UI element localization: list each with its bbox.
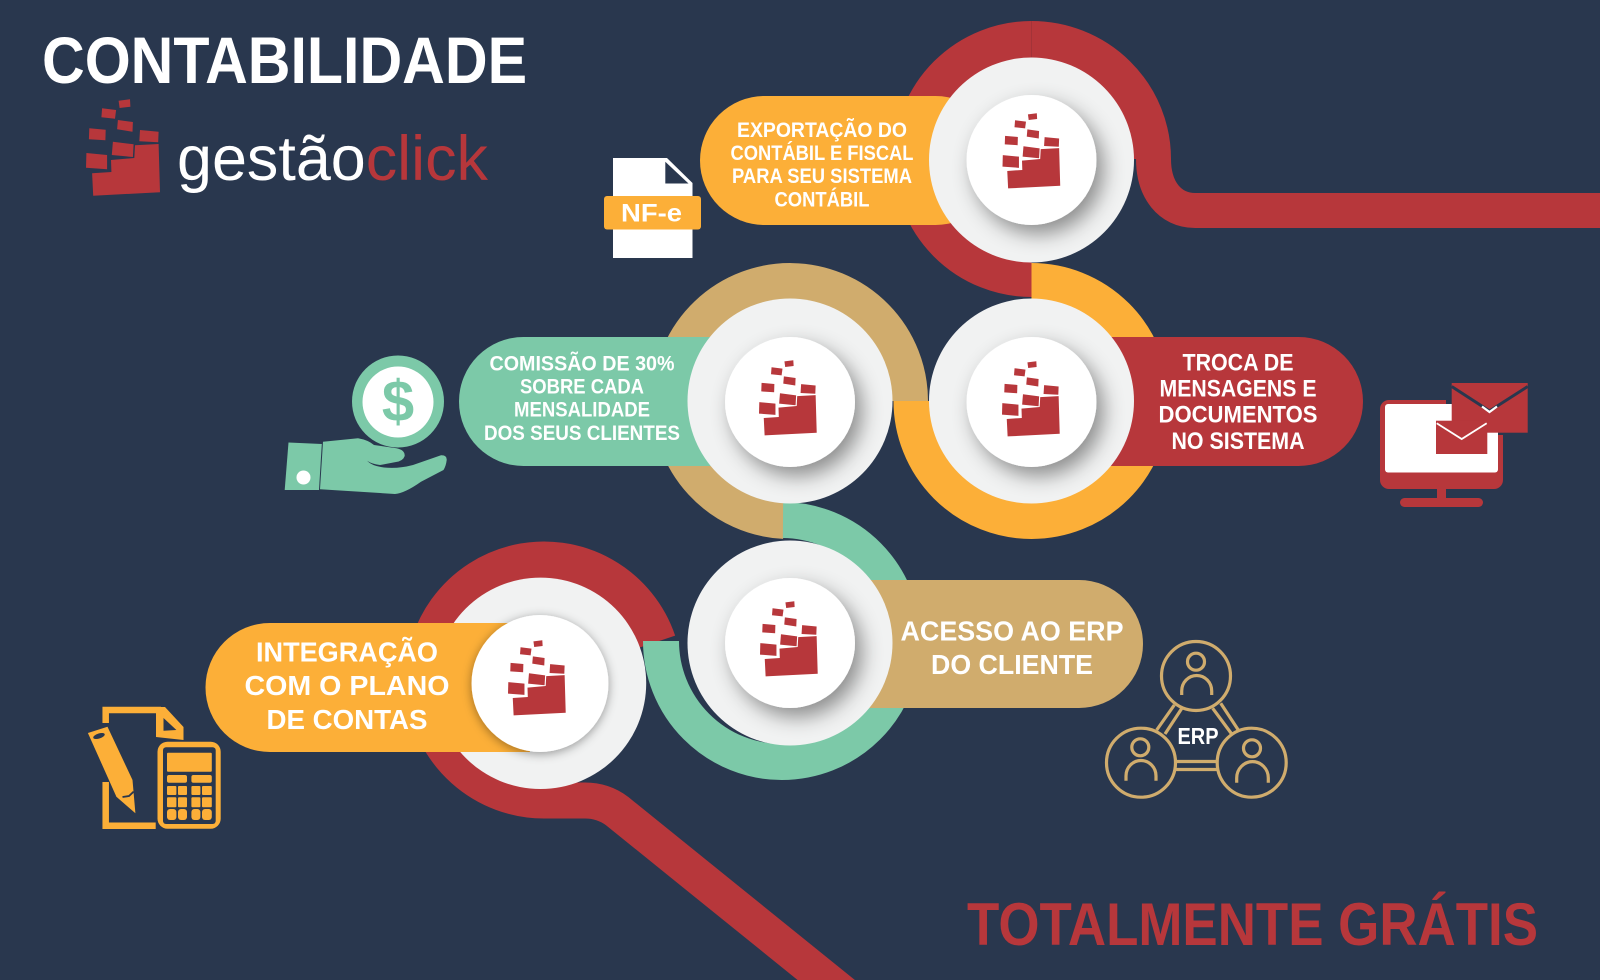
text: acesso ao ERP: DO CLIENTE xyxy=(931,649,1093,680)
text: exportação xyxy=(730,117,914,212)
icon: hand with coin: $ xyxy=(382,369,414,434)
icon: ERP network xyxy=(1106,642,1286,797)
pill: comissão xyxy=(459,337,779,466)
pill: acesso ao ERP xyxy=(800,580,1143,708)
text: integração: INTEGRAÇÃO xyxy=(256,636,438,668)
pill: exportação xyxy=(700,96,1000,225)
brand logo xyxy=(86,99,488,196)
icon: document, pencil and calculator xyxy=(88,707,221,829)
ribbon: red lower path xyxy=(425,561,851,980)
text: integração: COM O PLANO xyxy=(244,670,450,701)
icon: NF-e file: NF-e xyxy=(621,200,682,228)
text: troca de mensagens: NO SISTEMA xyxy=(1172,428,1304,455)
text: comissão: DOS SEUS CLIENTES xyxy=(484,421,680,445)
text: comissão: COMISSÃO DE 30% xyxy=(490,350,674,376)
icon: monitor with envelopes xyxy=(1380,383,1528,507)
pill: troca de mensagens xyxy=(1040,337,1363,466)
node: troca circle xyxy=(929,298,1134,504)
icon: hand with coin xyxy=(285,356,447,494)
node: integração circle xyxy=(206,578,646,789)
text: exportação: CONTÁBIL xyxy=(774,186,870,212)
text: integração: DE CONTAS xyxy=(266,704,428,735)
text: exportação: EXPORTAÇÃO DO xyxy=(737,117,907,142)
title: CONTABILIDADE xyxy=(42,23,527,97)
tagline: TOTALMENTE GRÁTIS xyxy=(967,891,1538,958)
text: exportação: PARA SEU SISTEMA xyxy=(732,164,912,188)
ribbon: red top path xyxy=(913,21,1600,278)
text: acesso ao ERP xyxy=(900,616,1124,680)
text: comissão xyxy=(484,350,680,445)
ribbon: tan ring xyxy=(670,281,910,521)
ribbon: green ring xyxy=(661,520,903,762)
icon: NF-e file xyxy=(604,158,701,258)
text: exportação: CONTÁBIL E FISCAL xyxy=(730,140,914,165)
text: troca de mensagens: TROCA DE xyxy=(1182,350,1294,376)
text: integração xyxy=(244,636,450,735)
node: acesso circle xyxy=(688,540,892,746)
ribbon: orange ring xyxy=(912,281,1152,521)
text: comissão: MENSALIDADE xyxy=(514,398,650,422)
text: comissão: SOBRE CADA xyxy=(520,374,644,398)
brand logo: gestãoclick xyxy=(177,124,488,194)
text: troca de mensagens: MENSAGENS E xyxy=(1160,376,1316,402)
text: troca de mensagens: DOCUMENTOS xyxy=(1158,402,1318,428)
node: exportação circle xyxy=(929,58,1134,262)
icon: ERP network: ERP xyxy=(1178,723,1218,749)
text: troca de mensagens xyxy=(1158,350,1318,455)
text: acesso ao ERP: ACESSO AO ERP xyxy=(900,616,1124,646)
node: comissão circle xyxy=(688,298,892,504)
